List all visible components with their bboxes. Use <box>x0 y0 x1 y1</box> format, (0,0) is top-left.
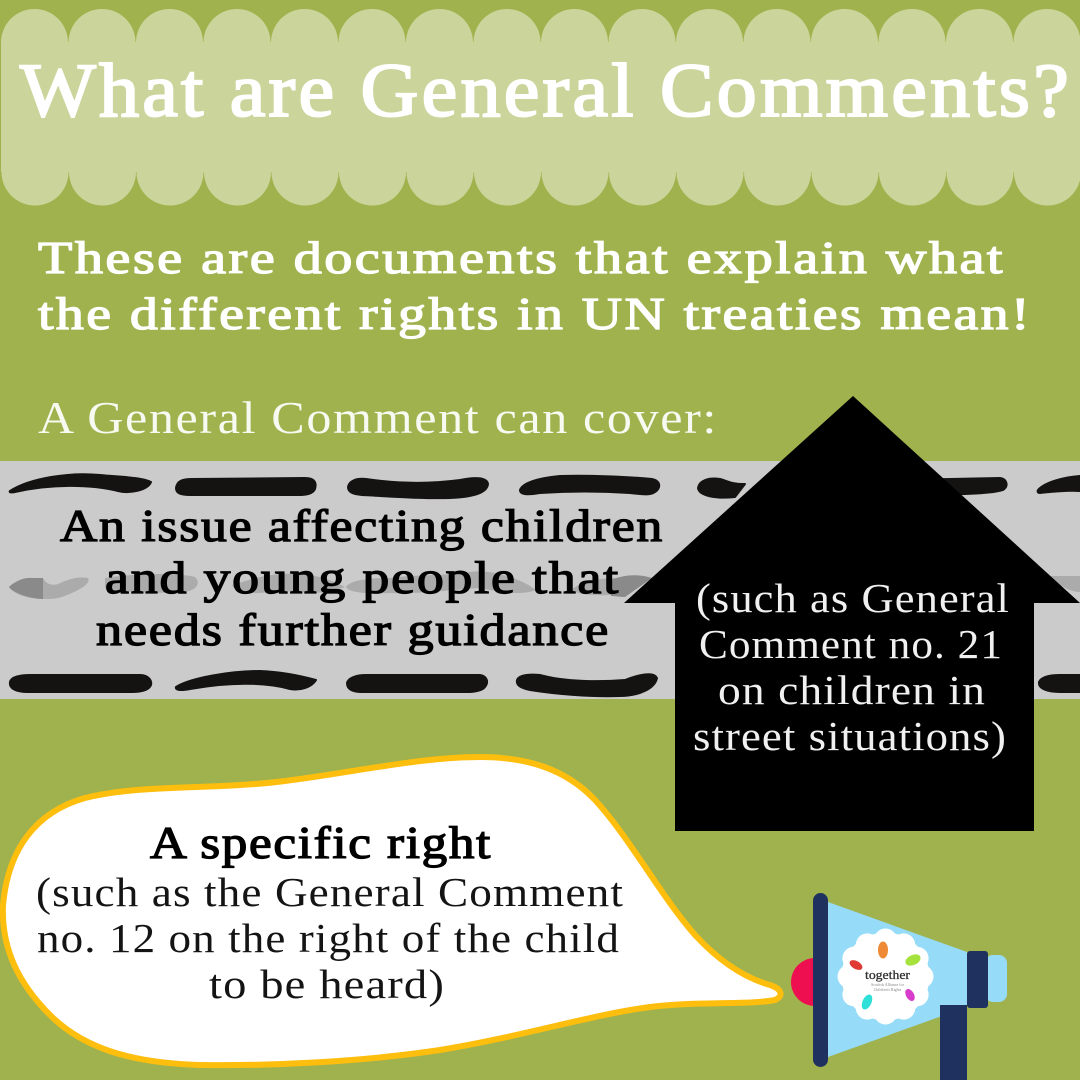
house callout text <box>693 575 1010 759</box>
house callout text: street situations) <box>693 713 1007 759</box>
brush strokes: middle row <box>9 571 1080 599</box>
issue text: and young people that <box>105 553 620 603</box>
house callout text: Comment no. 21 <box>699 621 1003 667</box>
brush strokes: top row <box>10 474 1080 498</box>
brush strokes: middle row darker ends <box>9 575 652 599</box>
panel: black house callout <box>624 396 1080 831</box>
bubble text: (such as the General Comment <box>36 869 624 915</box>
logo badge <box>838 928 934 1024</box>
bubble text <box>36 869 624 1007</box>
panel: speech bubble <box>3 757 781 1065</box>
subheading: A General Comment can cover: <box>38 392 718 443</box>
intro text <box>38 232 1032 339</box>
intro text: These are documents that explain what <box>38 232 1005 283</box>
icon: megaphone <box>791 893 1007 1080</box>
house callout text: on children in <box>718 667 986 713</box>
issue text <box>60 501 664 655</box>
title: What are General Comments? <box>20 49 1072 133</box>
issue text: An issue affecting children <box>60 501 664 551</box>
logo badge: Scottish Alliance for <box>871 982 905 987</box>
issue text: needs further guidance <box>96 605 610 655</box>
intro text: the different rights in UN treaties mean! <box>38 288 1032 339</box>
logo badge: Children's Rights <box>874 987 902 992</box>
bubble text: no. 12 on the right of the child <box>37 915 620 961</box>
brush strokes: bottom row <box>10 671 1080 696</box>
title banner with scalloped edges <box>1 9 1080 206</box>
bubble heading: A specific right <box>150 818 492 868</box>
bubble text: to be heard) <box>209 961 445 1007</box>
panel: issue band <box>0 461 1080 699</box>
logo badge: together <box>865 968 911 982</box>
house callout text: (such as General <box>696 575 1010 621</box>
